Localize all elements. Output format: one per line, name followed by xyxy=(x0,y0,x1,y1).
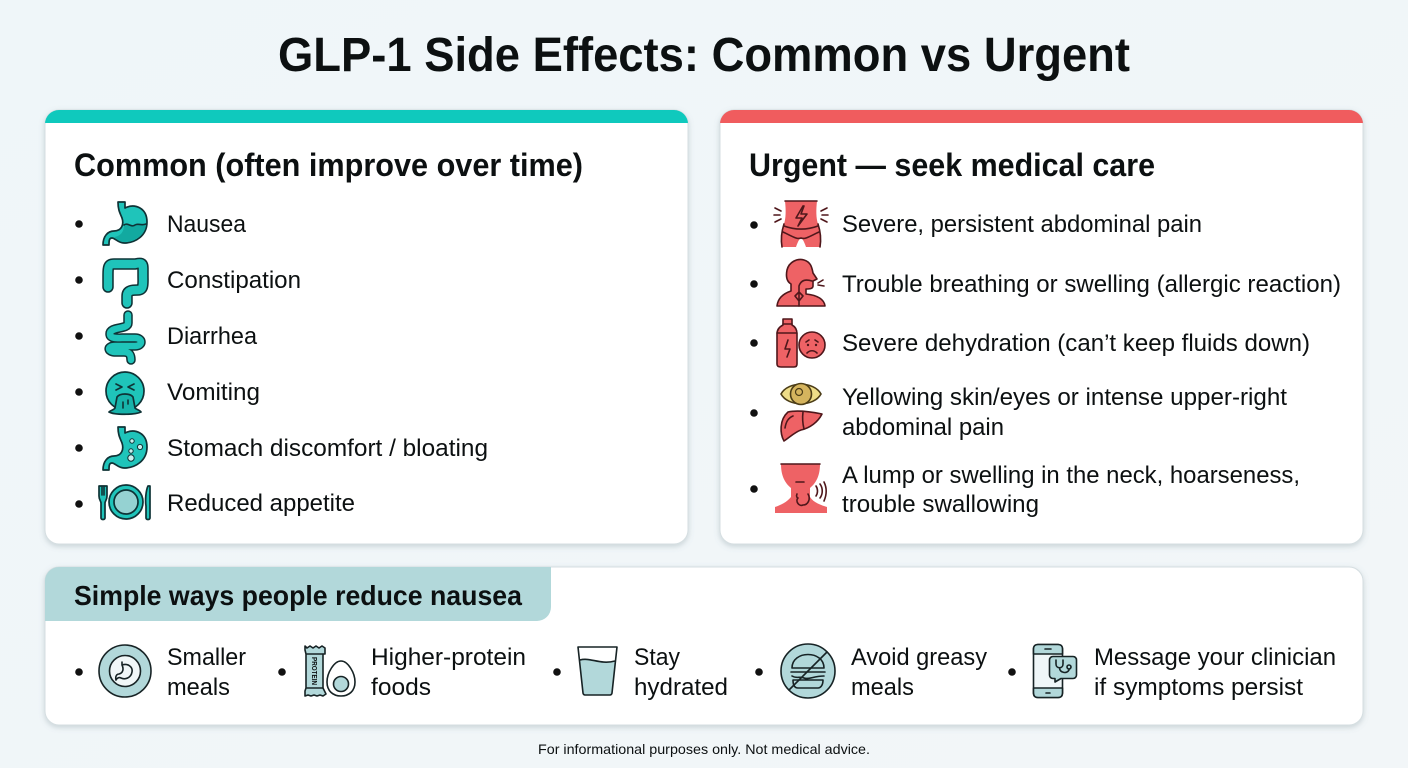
tip: stay hydrated: hydrated xyxy=(634,674,728,701)
icon: phone with stethoscope message xyxy=(1034,644,1076,698)
tip: smaller meals: Smaller xyxy=(167,644,246,671)
icon: protein bar and egg xyxy=(305,646,355,696)
tip: avoid greasy meals: Avoid greasy xyxy=(851,644,987,671)
icon: stomach with bubbles xyxy=(103,427,147,470)
tip: stay hydrated xyxy=(553,644,728,701)
item: neck lump: A lump or swelling in the neck, hoarseness, xyxy=(842,462,1300,489)
item: neck lump xyxy=(750,462,1300,518)
item: trouble breathing: Trouble breathing or swelling (allergic reaction) xyxy=(842,271,1341,298)
item: stomach discomfort: Stomach discomfort / bloating xyxy=(167,435,488,462)
tip: smaller meals xyxy=(75,644,246,701)
icon: vomiting face xyxy=(106,372,144,414)
icon: neck with lump and sound waves xyxy=(775,464,827,513)
icon: stomach with wavy fluid xyxy=(103,202,147,245)
item: trouble breathing xyxy=(750,259,1341,306)
item: abdominal pain xyxy=(750,201,1202,247)
tip: higher-protein foods xyxy=(278,644,526,701)
item: jaundice or liver pain: abdominal pain xyxy=(842,414,1004,441)
item: diarrhea xyxy=(75,315,258,360)
tip: message your clinician: if symptoms persist xyxy=(1094,674,1303,701)
item: diarrhea: Diarrhea xyxy=(167,323,258,350)
tip: avoid greasy meals xyxy=(755,644,987,701)
icon: protein bar and egg: PROTEIN xyxy=(310,657,317,685)
item: abdominal pain: Severe, persistent abdominal pain xyxy=(842,211,1202,238)
icon: crossed-out burger xyxy=(781,644,835,698)
icon: plate, fork and knife xyxy=(99,485,150,520)
tip: stay hydrated: Stay xyxy=(634,644,680,671)
title: GLP-1 Side Effects: Common vs Urgent xyxy=(278,29,1130,82)
tip: message your clinician: Message your clinician xyxy=(1094,644,1336,671)
tip: avoid greasy meals: meals xyxy=(851,674,914,701)
item: reduced appetite: Reduced appetite xyxy=(167,490,355,517)
heading: common: Common (often improve over time) xyxy=(74,147,583,183)
tip: message your clinician xyxy=(1008,644,1336,701)
item: neck lump: trouble swallowing xyxy=(842,491,1039,518)
panel: urgent symptoms xyxy=(720,110,1363,544)
icon: small intestine xyxy=(109,315,141,360)
item: severe dehydration xyxy=(750,319,1310,367)
heading tab: simple ways xyxy=(45,567,551,621)
item: nausea: Nausea xyxy=(167,211,247,238)
tip: higher-protein foods: Higher-protein xyxy=(371,644,526,671)
icon: yellow eye and liver xyxy=(781,384,822,441)
item: vomiting xyxy=(75,372,260,414)
icon: large intestine xyxy=(108,263,143,303)
item: stomach discomfort xyxy=(75,427,488,470)
icon: head and throat profile xyxy=(777,259,825,306)
item: constipation xyxy=(75,263,301,303)
item: reduced appetite xyxy=(75,485,355,520)
icon: abdomen with lightning bolt xyxy=(774,201,828,247)
panel: ways to reduce nausea xyxy=(45,567,1363,725)
panel: common side effects xyxy=(45,110,688,544)
icon: glass of water xyxy=(578,647,617,695)
item: constipation: Constipation xyxy=(167,267,301,294)
icon: plate with small stomach xyxy=(99,645,151,697)
heading: urgent: Urgent — seek medical care xyxy=(749,147,1155,183)
tip: higher-protein foods: foods xyxy=(371,674,431,701)
item: vomiting: Vomiting xyxy=(167,379,260,406)
item: severe dehydration: Severe dehydration (can’t keep fluids down) xyxy=(842,330,1310,357)
tip: smaller meals: meals xyxy=(167,674,230,701)
heading tab: simple ways: Simple ways people reduce nausea xyxy=(74,580,522,611)
item: jaundice or liver pain xyxy=(750,384,1287,441)
icon: water bottle and sad face xyxy=(777,319,825,367)
footer disclaimer: For informational purposes only. Not medical advice. xyxy=(538,741,870,757)
item: jaundice or liver pain: Yellowing skin/eyes or intense upper-right xyxy=(842,384,1287,411)
item: nausea xyxy=(75,202,247,245)
